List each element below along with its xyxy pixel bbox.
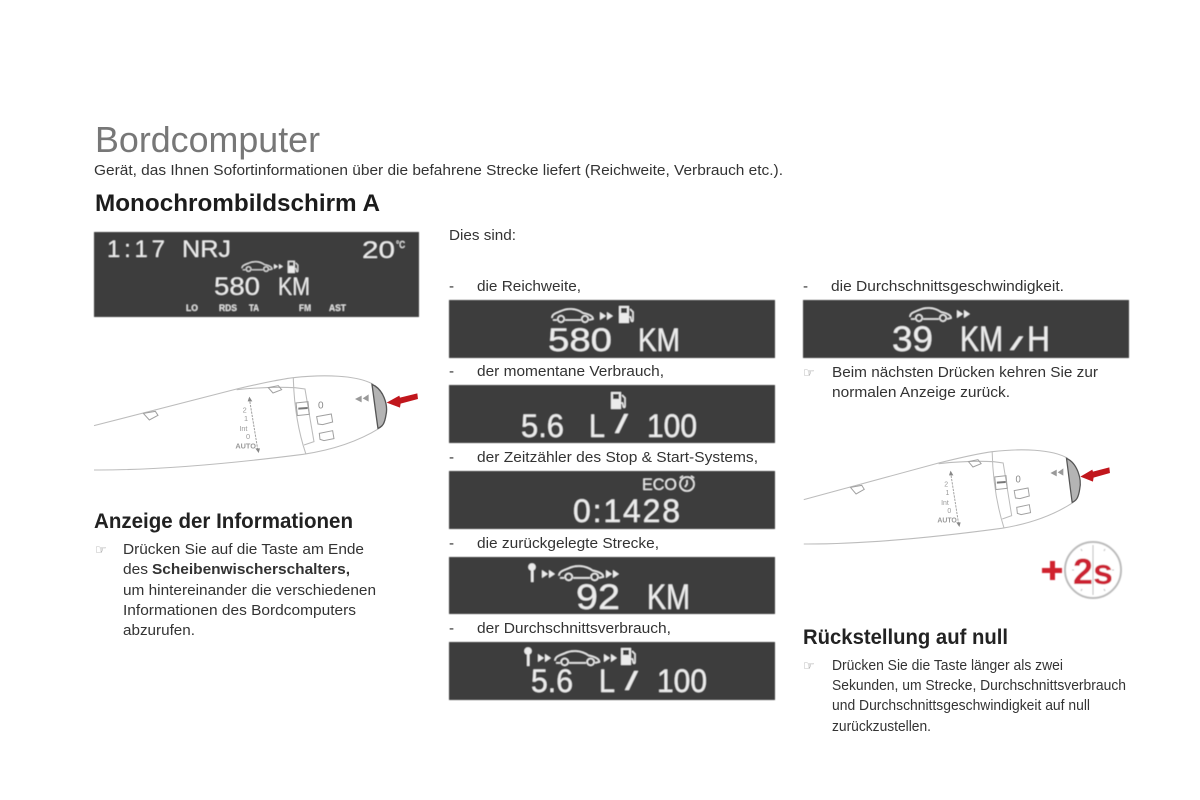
label: range: die Reichweite, — [477, 278, 581, 295]
panel: average consumption display — [449, 642, 775, 700]
illustration: wiper stalk, long press: 2 — [944, 480, 948, 488]
illustration: wiper stalk, long press — [804, 450, 1110, 544]
text block: reset instructions: und Durchschnittsgeschwindigkeit auf null — [832, 698, 1090, 714]
panel: current consumption display: / — [615, 409, 629, 439]
panel: range display: 580 — [548, 322, 612, 358]
illustration: wiper stalk with button arrow: 1 — [244, 414, 248, 423]
panel: average speed display: KM — [960, 320, 1003, 359]
panel: current consumption display: 100 — [647, 408, 697, 444]
text: Dies sind: Dies sind: — [449, 227, 516, 244]
panel: average consumption display: L — [599, 663, 615, 699]
panel: monochrome screen A: LO — [186, 303, 198, 313]
label: range: - — [449, 278, 454, 295]
panel: monochrome screen A: 1:17 — [107, 236, 165, 263]
panel: average consumption display: / — [625, 666, 639, 696]
panel: average speed display: H — [1027, 320, 1050, 359]
panel: average speed display — [803, 300, 1129, 359]
label: average speed: die Durchschnittsgeschwindigkeit. — [831, 278, 1064, 295]
panel: stop and start display: ECO — [642, 475, 677, 494]
text block: instructions: abzurufen. — [123, 622, 195, 639]
text block: instructions: um hintereinander die verschiedenen — [123, 582, 376, 599]
text block: instructions: Drücken Sie auf die Taste am Ende — [123, 541, 364, 558]
illustration: wiper stalk, long press: Int — [941, 499, 949, 507]
heading: Anzeige der Informationen: Anzeige der Informationen — [94, 510, 353, 533]
panel: distance display: KM — [647, 578, 690, 617]
illustration: wiper stalk with button arrow: 0 — [318, 400, 324, 411]
label: stop and start timer: - — [449, 449, 454, 466]
panel: current consumption display: 5.6 — [521, 408, 564, 444]
panel: stop and start display: 0:1428 — [573, 493, 680, 529]
text block: instructions: Scheibenwischerschalters, — [152, 561, 350, 578]
panel: range display: KM — [638, 322, 680, 358]
text block: reset instructions — [803, 658, 1126, 735]
text block: instructions — [95, 541, 376, 639]
text block: next press: Beim nächsten Drücken kehren Sie zur — [832, 364, 1098, 381]
title: Bordcomputer — [95, 119, 320, 160]
illustration: wiper stalk, long press: 0 — [1015, 474, 1021, 485]
text block: instructions: des — [123, 561, 148, 578]
illustration: wiper stalk, long press: 0 — [947, 507, 951, 515]
illustration: wiper stalk with button arrow: Int — [239, 424, 247, 433]
icon: plus two seconds timer: 2s — [1073, 551, 1113, 592]
label: average consumption: - — [449, 620, 454, 637]
text block: reset instructions: Drücken Sie die Taste länger als zwei — [832, 658, 1063, 674]
panel: average consumption display: 5.6 — [531, 663, 573, 699]
panel: monochrome screen A: 580 — [214, 273, 260, 301]
panel: average speed display: 39 — [892, 320, 933, 359]
panel: monochrome screen A: NRJ — [182, 236, 231, 263]
text block: reset instructions: zurückzustellen. — [832, 719, 931, 735]
label: distance travelled: die zurückgelegte Strecke, — [477, 535, 659, 552]
label: stop and start timer: der Zeitzähler des Stop & Start-Systems, — [477, 449, 758, 466]
label: current consumption: - — [449, 363, 454, 380]
panel: monochrome screen A: AST — [329, 303, 346, 313]
illustration: wiper stalk, long press: 1 — [946, 489, 949, 497]
text block: next press: ☞ — [803, 366, 815, 381]
text block: reset instructions: Sekunden, um Strecke, Durchschnittsverbrauch — [832, 678, 1126, 694]
heading: Rückstellung auf null: Rückstellung auf null — [803, 626, 1008, 649]
panel: monochrome screen A: KM — [278, 273, 310, 301]
text block: instructions: Informationen des Bordcomputers — [123, 602, 356, 619]
label: average speed: - — [803, 278, 808, 295]
intro text: Gerät, das Ihnen Sofortinformationen über die befahrene Strecke liefert (Reichweite, Verbrauch etc.). — [94, 162, 783, 179]
label: average consumption: der Durchschnittsverbrauch, — [477, 620, 671, 637]
illustration: wiper stalk with button arrow: 2 — [243, 405, 247, 414]
panel: distance display: 92 — [576, 578, 620, 617]
illustration: wiper stalk, long press: AUTO — [937, 516, 957, 524]
panel: average speed display: / — [1010, 334, 1023, 354]
text block: next press: normalen Anzeige zurück. — [832, 384, 1010, 401]
panel: average consumption display: 100 — [657, 663, 707, 699]
label: current consumption: der momentane Verbrauch, — [477, 363, 664, 380]
heading: Monochrombildschirm A: Monochrombildschirm A — [95, 190, 380, 217]
text block: instructions: ☞ — [95, 543, 107, 558]
panel: distance display — [449, 557, 775, 617]
panel: current consumption display: L — [589, 408, 605, 444]
panel: monochrome screen A — [94, 232, 419, 317]
illustration: wiper stalk with button arrow: 0 — [246, 432, 250, 441]
illustration: wiper stalk with button arrow: AUTO — [235, 441, 256, 450]
panel: monochrome screen A: FM — [299, 303, 311, 313]
panel: range display — [449, 300, 775, 358]
panel: current consumption display — [449, 385, 775, 444]
text block: next press — [803, 364, 1098, 401]
label: distance travelled: - — [449, 535, 454, 552]
text block: reset instructions: ☞ — [803, 659, 815, 674]
illustration: wiper stalk with button arrow — [94, 376, 418, 470]
panel: monochrome screen A: TA — [249, 303, 259, 313]
icon: plus two seconds timer — [1042, 542, 1121, 598]
panel: monochrome screen A: RDS — [219, 303, 237, 313]
panel: monochrome screen A: °C — [396, 240, 405, 251]
panel: monochrome screen A: 20 — [362, 237, 395, 264]
panel: stop and start display — [449, 471, 775, 529]
